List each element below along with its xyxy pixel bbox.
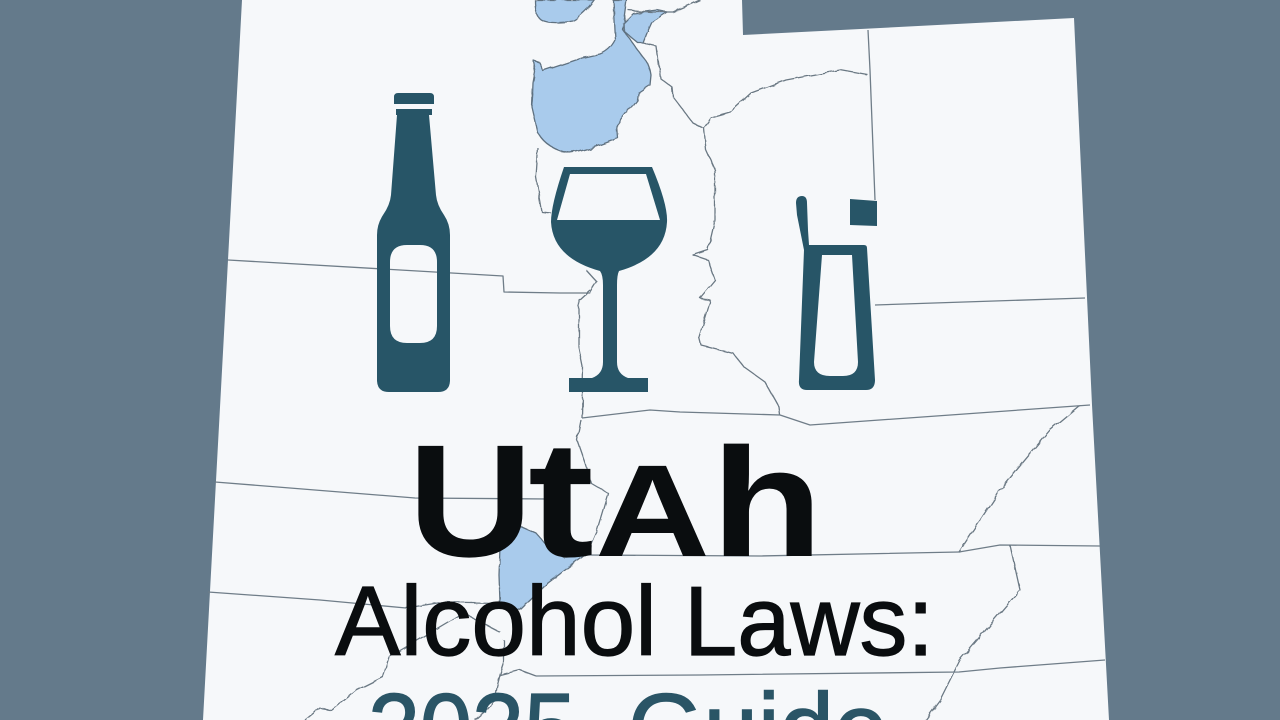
subtitle: Alcohol Laws: Alcohol [335,566,657,676]
icon: beer bottle [377,93,450,392]
Utah state map shape [203,0,1109,720]
icon: wine glass [551,167,667,392]
rugged boundary lines [305,0,1080,720]
title: Utah: t [528,407,594,591]
icon: tall glass with straw [796,196,875,390]
lakes [499,0,667,612]
subtitle: Alcohol Laws: Laws: [684,566,934,676]
county boundary lines [208,30,1105,676]
icon: square mark [850,199,877,226]
title: Utah: A [595,437,710,584]
title: Utah: h [711,416,823,589]
title: Utah: U [408,411,533,590]
